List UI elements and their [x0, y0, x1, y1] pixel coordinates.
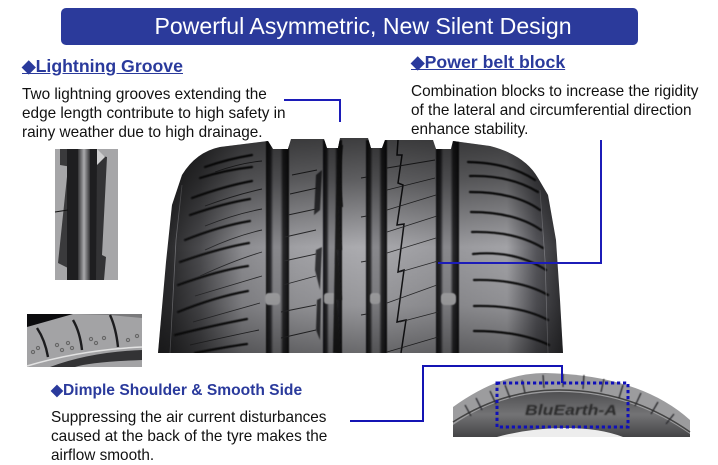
shoulder edge lines — [170, 185, 182, 353]
thin sipes — [190, 160, 438, 352]
text: power belt block — [411, 83, 698, 138]
text: dimple shoulder: airflow smooth. — [51, 447, 154, 464]
text: dimple shoulder: caused at the back of the tyre makes the — [51, 428, 327, 445]
text: power belt block: enhance stability. — [411, 121, 528, 138]
lightning groove zigzags — [333, 145, 343, 353]
inset: lightning groove close-up — [55, 149, 118, 280]
title bar: Powerful Asymmetric, New Silent Design — [154, 13, 572, 39]
shoulder sipes left — [175, 155, 252, 353]
heading: lightning groove: ◆Lightning Groove — [22, 56, 183, 76]
text: dimple shoulder: Suppressing the air current disturbances — [51, 409, 326, 426]
tyre tread photo — [27, 99, 690, 437]
heading: power belt block: ◆Power belt block — [411, 52, 565, 72]
connector: power belt block — [438, 140, 601, 263]
connector: lightning groove — [284, 100, 340, 122]
tyre side photo — [453, 373, 690, 437]
shoulder sipes right — [468, 162, 549, 345]
grooves — [266, 140, 459, 355]
tyre brand lettering: BluEarth-A — [525, 402, 617, 419]
text: lightning groove — [22, 86, 286, 141]
text: power belt block: of the lateral and circumferential direction — [411, 102, 692, 119]
inset: dimple shoulder close-up — [27, 314, 142, 367]
groove bumps — [265, 293, 456, 305]
title bar — [61, 8, 638, 45]
text: lightning groove: rainy weather due to high drainage. — [22, 124, 263, 141]
text: power belt block: Combination blocks to increase the rigidity — [411, 83, 698, 100]
connector: dimple shoulder — [350, 366, 562, 421]
heading: dimple shoulder: ◆Dimple Shoulder & Smooth Side — [51, 382, 302, 399]
dotted highlight box — [497, 383, 628, 427]
text: lightning groove: Two lightning grooves extending the — [22, 86, 267, 103]
text: dimple shoulder — [51, 409, 327, 464]
text: lightning groove: edge length contribute to high safety in — [22, 105, 286, 122]
